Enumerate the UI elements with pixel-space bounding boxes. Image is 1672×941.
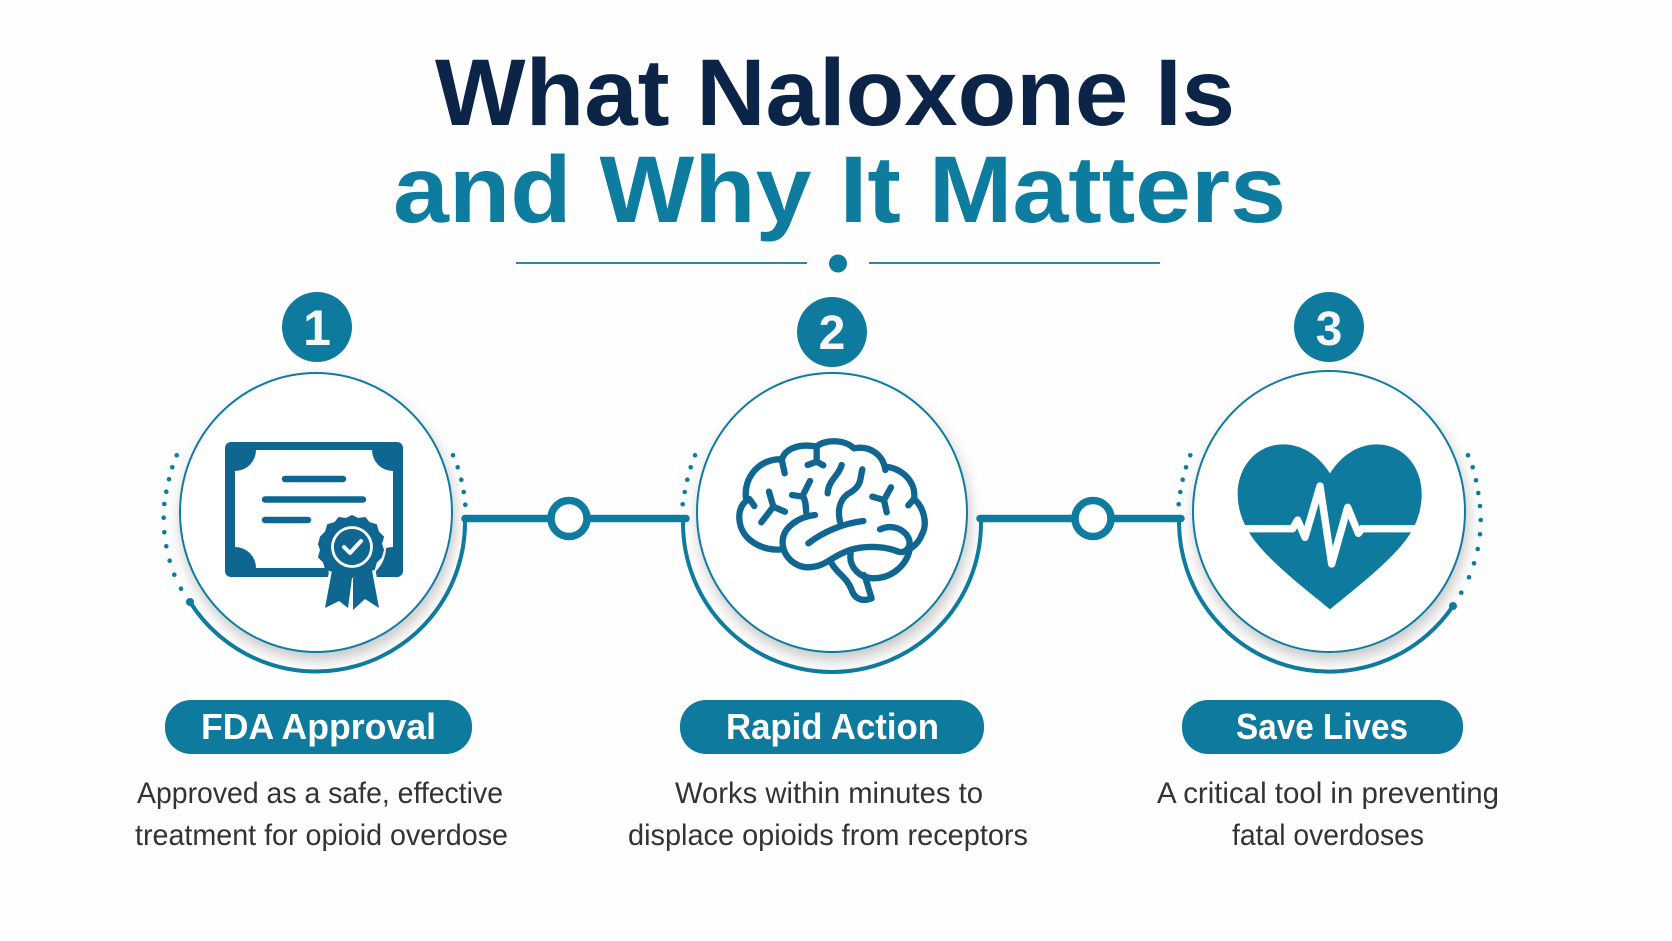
number badge 2: [797, 297, 867, 367]
circle 2: [697, 373, 967, 652]
panel: step 2 rapid action: [628, 297, 1028, 852]
description 3: A critical tool in preventing: [1157, 777, 1499, 810]
description 2: Works within minutes to: [675, 777, 983, 810]
outer arc and dots 1: [161, 453, 468, 671]
connector: step 1 to step 2: [465, 500, 686, 536]
title divider: [516, 254, 1160, 272]
number badge 2: 2: [819, 307, 845, 360]
outer arc and dots 3: [1176, 453, 1483, 672]
panel: step 3 save lives: [1157, 292, 1499, 852]
description 1: Approved as a safe, effective: [137, 777, 503, 810]
icon: certificate with ribbon: [225, 442, 403, 610]
panel: step 1 FDA approval: [135, 292, 508, 852]
title: and Why It Matters: [393, 137, 1286, 243]
label pill: Save Lives: Save Lives: [1236, 706, 1408, 747]
number badge 1: 1: [303, 300, 331, 356]
label pill: Save Lives: [1182, 700, 1463, 754]
description 3: [1157, 777, 1499, 852]
description 1: [135, 777, 508, 852]
outer arc and dots 2: [680, 453, 981, 672]
number badge 1: [282, 292, 352, 362]
label pill: FDA Approval: [165, 700, 472, 754]
label pill: FDA Approval: FDA Approval: [201, 706, 436, 747]
label pill: Rapid Action: Rapid Action: [726, 706, 939, 747]
circle 1: [180, 373, 452, 652]
label pill: Rapid Action: [680, 700, 984, 754]
icon: brain: [739, 441, 925, 600]
description 2: [628, 777, 1028, 852]
description 1: treatment for opioid overdose: [135, 819, 508, 852]
title: What Naloxone Is: [435, 40, 1235, 146]
connector: step 2 to step 3: [980, 500, 1181, 536]
number badge 3: 3: [1316, 303, 1342, 356]
title: [393, 40, 1286, 243]
number badge 3: [1294, 292, 1364, 362]
icon: heart with pulse line: [1238, 444, 1422, 609]
circle 3: [1193, 371, 1465, 652]
description 2: displace opioids from receptors: [628, 819, 1028, 852]
description 3: fatal overdoses: [1232, 819, 1424, 852]
